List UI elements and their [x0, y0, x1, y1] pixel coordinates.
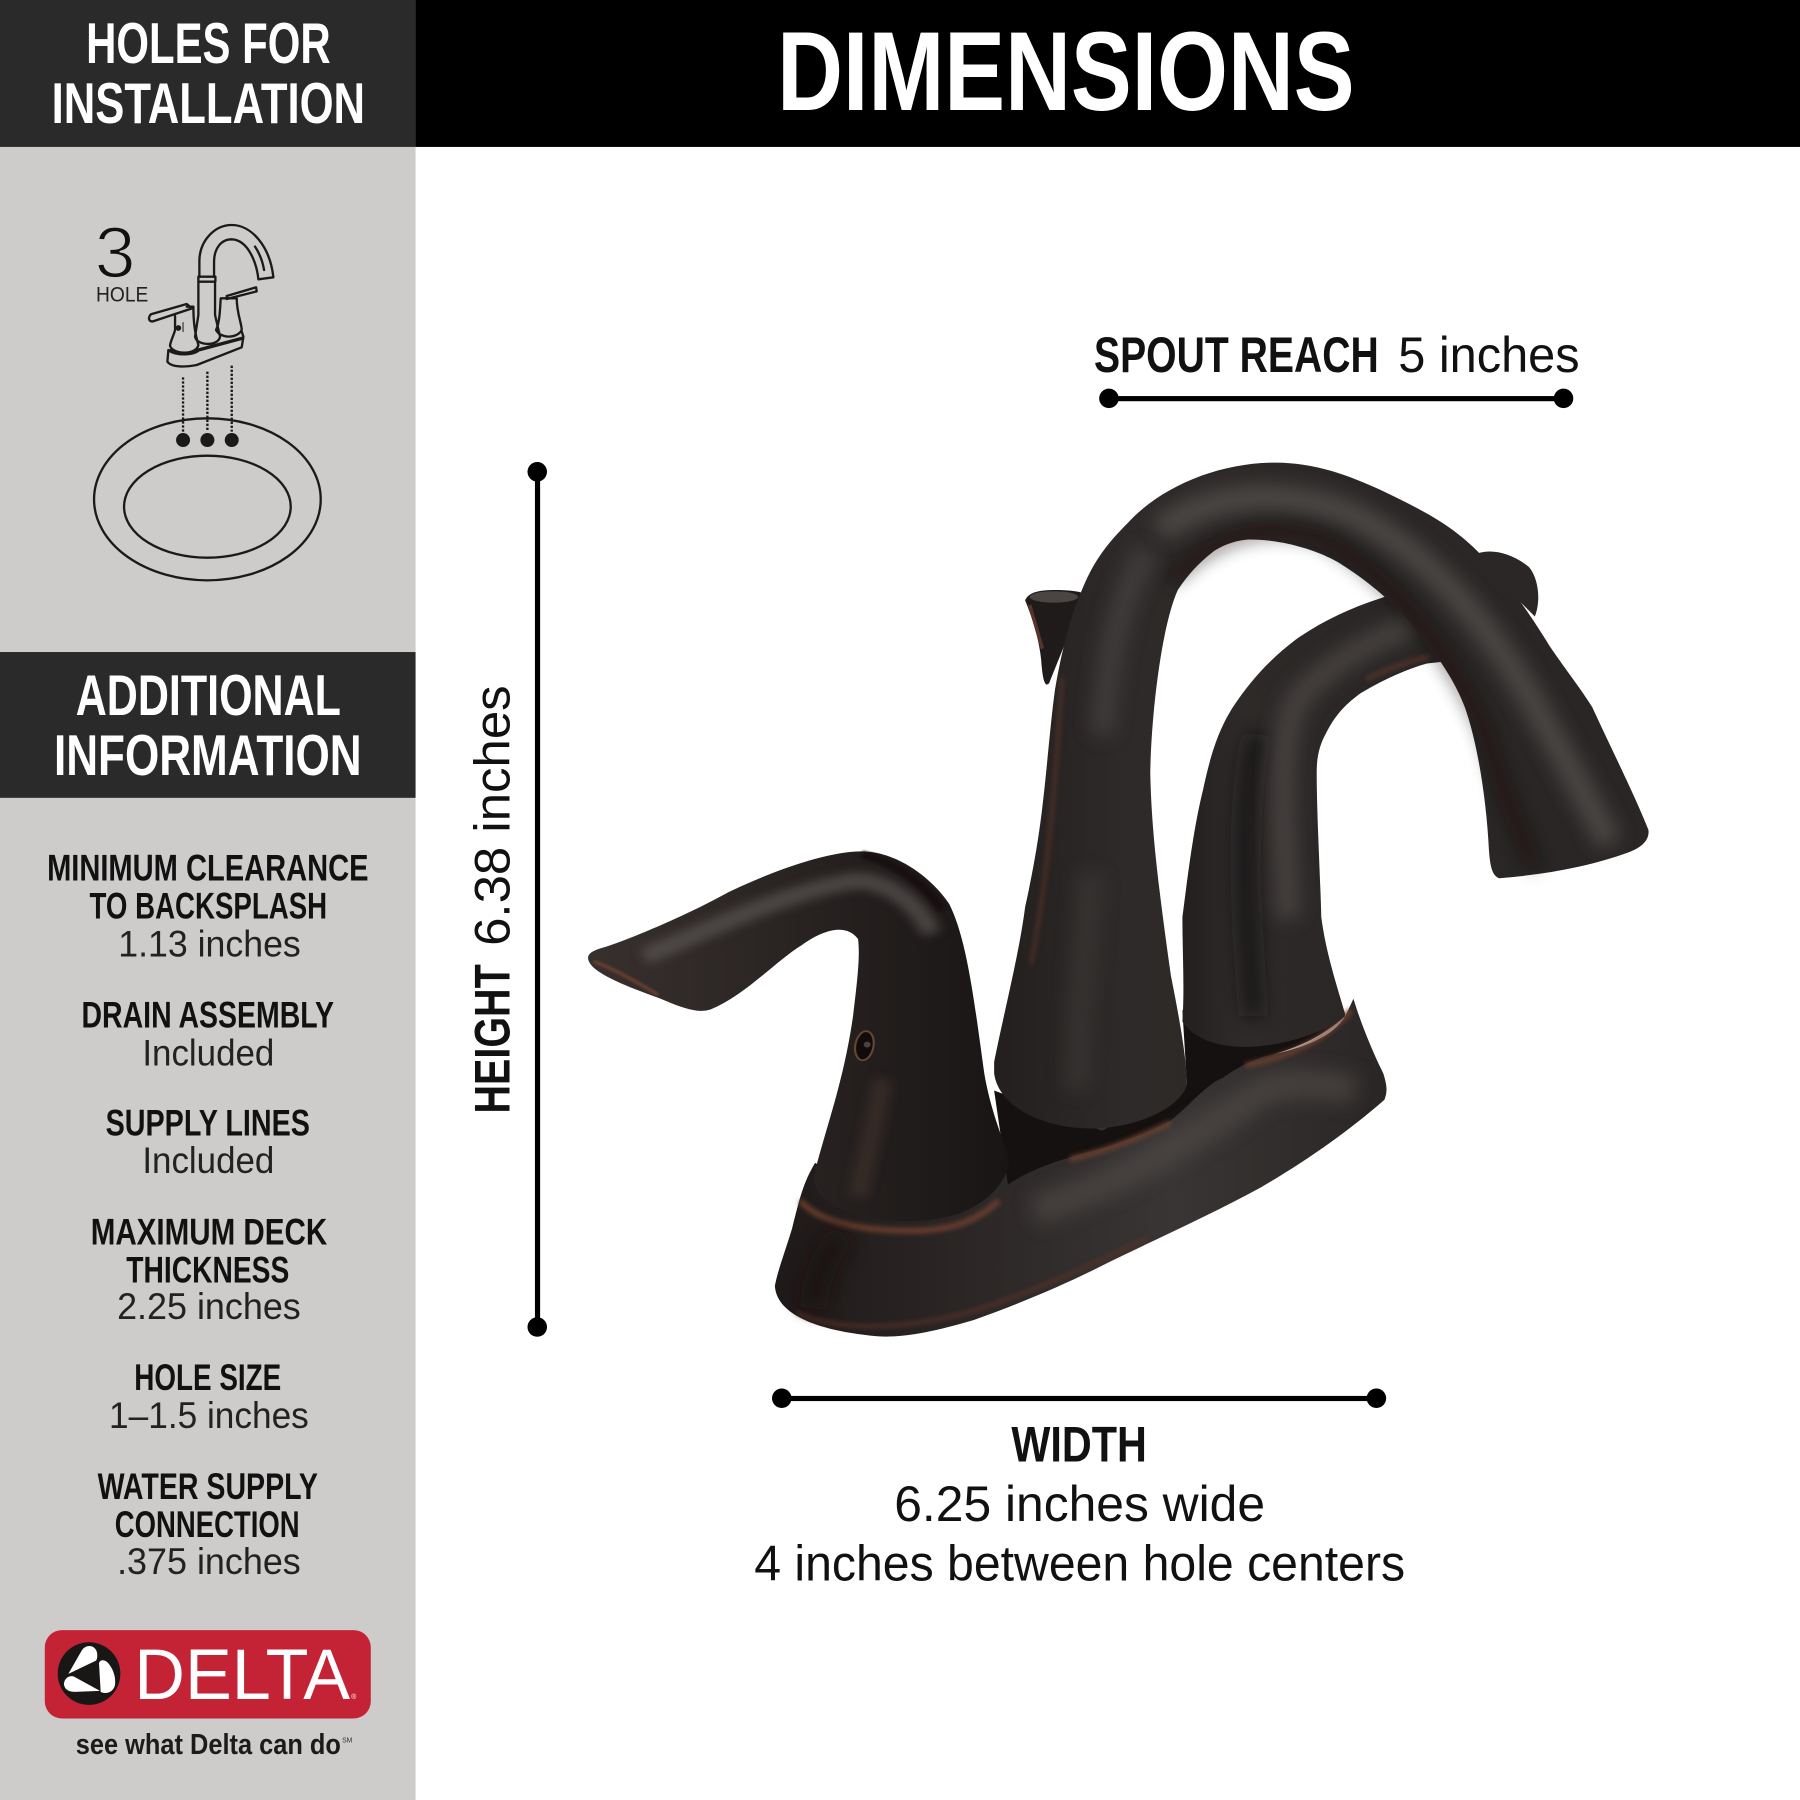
- logo: delta: [45, 1630, 371, 1761]
- title: dimensions: DIMENSIONS: [777, 8, 1355, 134]
- spec: maximum deck thickness: MAXIMUM DECK: [91, 1211, 328, 1252]
- spec: water supply connection: CONNECTION: [115, 1504, 300, 1545]
- icon: 3 hole faucet and sink diagram: [94, 212, 321, 580]
- dimension: spout reach: 5 inches: [1398, 326, 1580, 383]
- spout: [994, 463, 1649, 1128]
- icon: 3 hole faucet and sink diagram: 3: [95, 212, 135, 293]
- dimension: width: 6.25 inches wide: [894, 1475, 1265, 1532]
- spec: drain assembly: [82, 994, 334, 1073]
- spec: water supply connection: [98, 1466, 318, 1582]
- logo: delta: see what Delta can do: [76, 1729, 341, 1761]
- dimension: height: HEIGHT: [464, 964, 521, 1114]
- dimension: spout reach: [1094, 326, 1580, 408]
- spec: supply lines: SUPPLY LINES: [106, 1102, 310, 1143]
- spec: supply lines: Included: [142, 1140, 274, 1181]
- dimension: spout reach: SPOUT REACH: [1094, 326, 1379, 383]
- heading: holes for installation: [0, 0, 416, 147]
- dimension: height: 6.38 inches: [464, 685, 521, 946]
- spec: minimum clearance: [47, 847, 368, 964]
- spec: minimum clearance: TO BACKSPLASH: [90, 885, 327, 926]
- spec: drain assembly: DRAIN ASSEMBLY: [82, 994, 334, 1035]
- heading: holes for installation: INSTALLATION: [52, 72, 365, 136]
- spec: maximum deck thickness: THICKNESS: [126, 1249, 289, 1290]
- heading: additional information: INFORMATION: [54, 724, 362, 788]
- dimension: height: [464, 462, 547, 1337]
- dimension: width: [754, 1388, 1405, 1592]
- spec: hole size: 1–1.5 inches: [109, 1395, 309, 1436]
- icon: 3 hole faucet and sink diagram: HOLE: [96, 282, 148, 307]
- heading: additional information: [0, 652, 416, 798]
- spec: minimum clearance: 1.13 inches: [118, 923, 301, 964]
- spec: drain assembly: Included: [142, 1032, 274, 1073]
- left panel: gray sidebar: [0, 147, 416, 1800]
- logo: delta: ®: [351, 1693, 356, 1701]
- back handle: [1182, 551, 1538, 1047]
- heading: additional information: ADDITIONAL: [76, 664, 341, 728]
- pop-up rod: [1025, 590, 1084, 685]
- faucet illustration: [588, 463, 1649, 1337]
- heading: holes for installation: HOLES FOR: [86, 12, 331, 76]
- spec: maximum deck thickness: [91, 1211, 328, 1327]
- dimension: width: 4 inches between hole centers: [754, 1535, 1405, 1592]
- spec: supply lines: [106, 1102, 310, 1181]
- front handle: [588, 851, 1009, 1221]
- spec: water supply connection: WATER SUPPLY: [98, 1466, 318, 1507]
- spec: minimum clearance: MINIMUM CLEARANCE: [47, 847, 368, 888]
- logo: delta: DELTA: [134, 1636, 351, 1715]
- dimension: width: WIDTH: [1011, 1415, 1147, 1472]
- spec: water supply connection: .375 inches: [117, 1541, 301, 1582]
- spec: hole size: [109, 1357, 309, 1436]
- logo: delta: SM: [342, 1738, 353, 1745]
- spec: maximum deck thickness: 2.25 inches: [117, 1286, 301, 1327]
- spec: hole size: HOLE SIZE: [134, 1357, 281, 1398]
- deck base: [775, 999, 1387, 1337]
- title: dimensions: [416, 0, 1800, 147]
